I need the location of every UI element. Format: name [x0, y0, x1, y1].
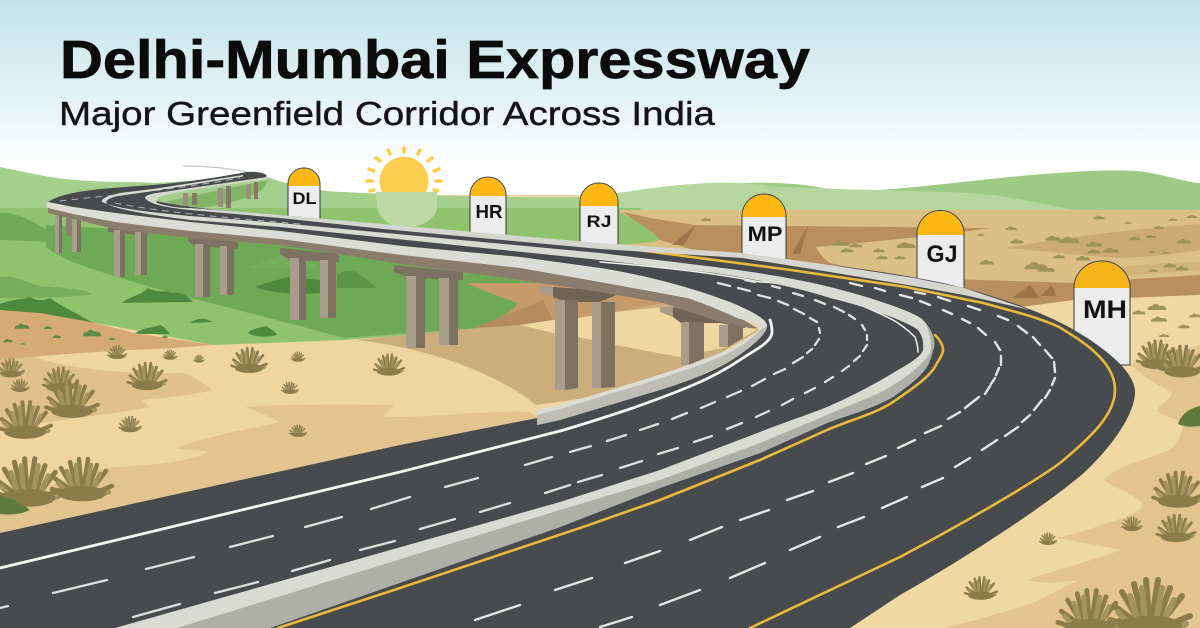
- far road markings: [60, 178, 380, 226]
- wisp of the far road: [183, 166, 247, 172]
- eroded canyon: [600, 212, 1200, 312]
- distant shadow under far road: [165, 180, 268, 208]
- pier 3: [188, 236, 238, 297]
- pier 7: [660, 307, 745, 365]
- median-side white line: [600, 262, 918, 352]
- deck underside fascia: [48, 206, 757, 328]
- lane markings: [0, 178, 1115, 628]
- milestone DL: DL: [292, 189, 316, 208]
- left lane edge line: [0, 320, 772, 568]
- top outer barrier: [145, 177, 1030, 310]
- back hills: [0, 167, 1200, 250]
- milestone MP: [742, 194, 786, 262]
- milestone RJ: [580, 183, 618, 250]
- pier 5: [394, 265, 463, 348]
- sand ground right: [840, 295, 1200, 628]
- milestone MP: MP: [748, 223, 782, 246]
- far piers: [183, 182, 258, 208]
- green fields: [0, 208, 660, 345]
- title: Delhi-Mumbai Expressway: [60, 30, 810, 90]
- milestone GJ: GJ: [926, 241, 958, 268]
- plateau scrub: [701, 215, 1197, 272]
- sky: [0, 0, 1200, 195]
- sand ground left: [0, 283, 760, 548]
- dry shrubs left: [0, 346, 404, 515]
- milestone MH: MH: [1083, 296, 1127, 324]
- subtitle: Major Greenfield Corridor Across India: [59, 95, 716, 132]
- inner elevated barrier: [46, 202, 767, 425]
- dry shrubs right: [965, 304, 1200, 628]
- green bushes on brown patch: [4, 323, 168, 345]
- dashes right carriageway: [475, 283, 1001, 620]
- pier 6: [540, 285, 623, 390]
- milestone HR: [470, 177, 506, 240]
- pier 4: [280, 248, 339, 320]
- sun: [367, 148, 441, 227]
- milestone GJ: [917, 210, 964, 295]
- bridge piers: [55, 182, 745, 390]
- milestone RJ: RJ: [586, 212, 612, 231]
- yellow edge lines: [278, 335, 943, 628]
- median barrier: [102, 175, 934, 628]
- milestones: [288, 168, 1130, 365]
- dashes left carriageway: [0, 283, 820, 608]
- milestone MH: [1074, 261, 1130, 365]
- milestone DL: [288, 168, 320, 224]
- milestone HR: HR: [476, 202, 502, 222]
- desert plateau right: [620, 210, 1200, 300]
- pier 1: [55, 212, 81, 253]
- road asphalt: [0, 172, 1135, 628]
- pier 2: [108, 225, 148, 277]
